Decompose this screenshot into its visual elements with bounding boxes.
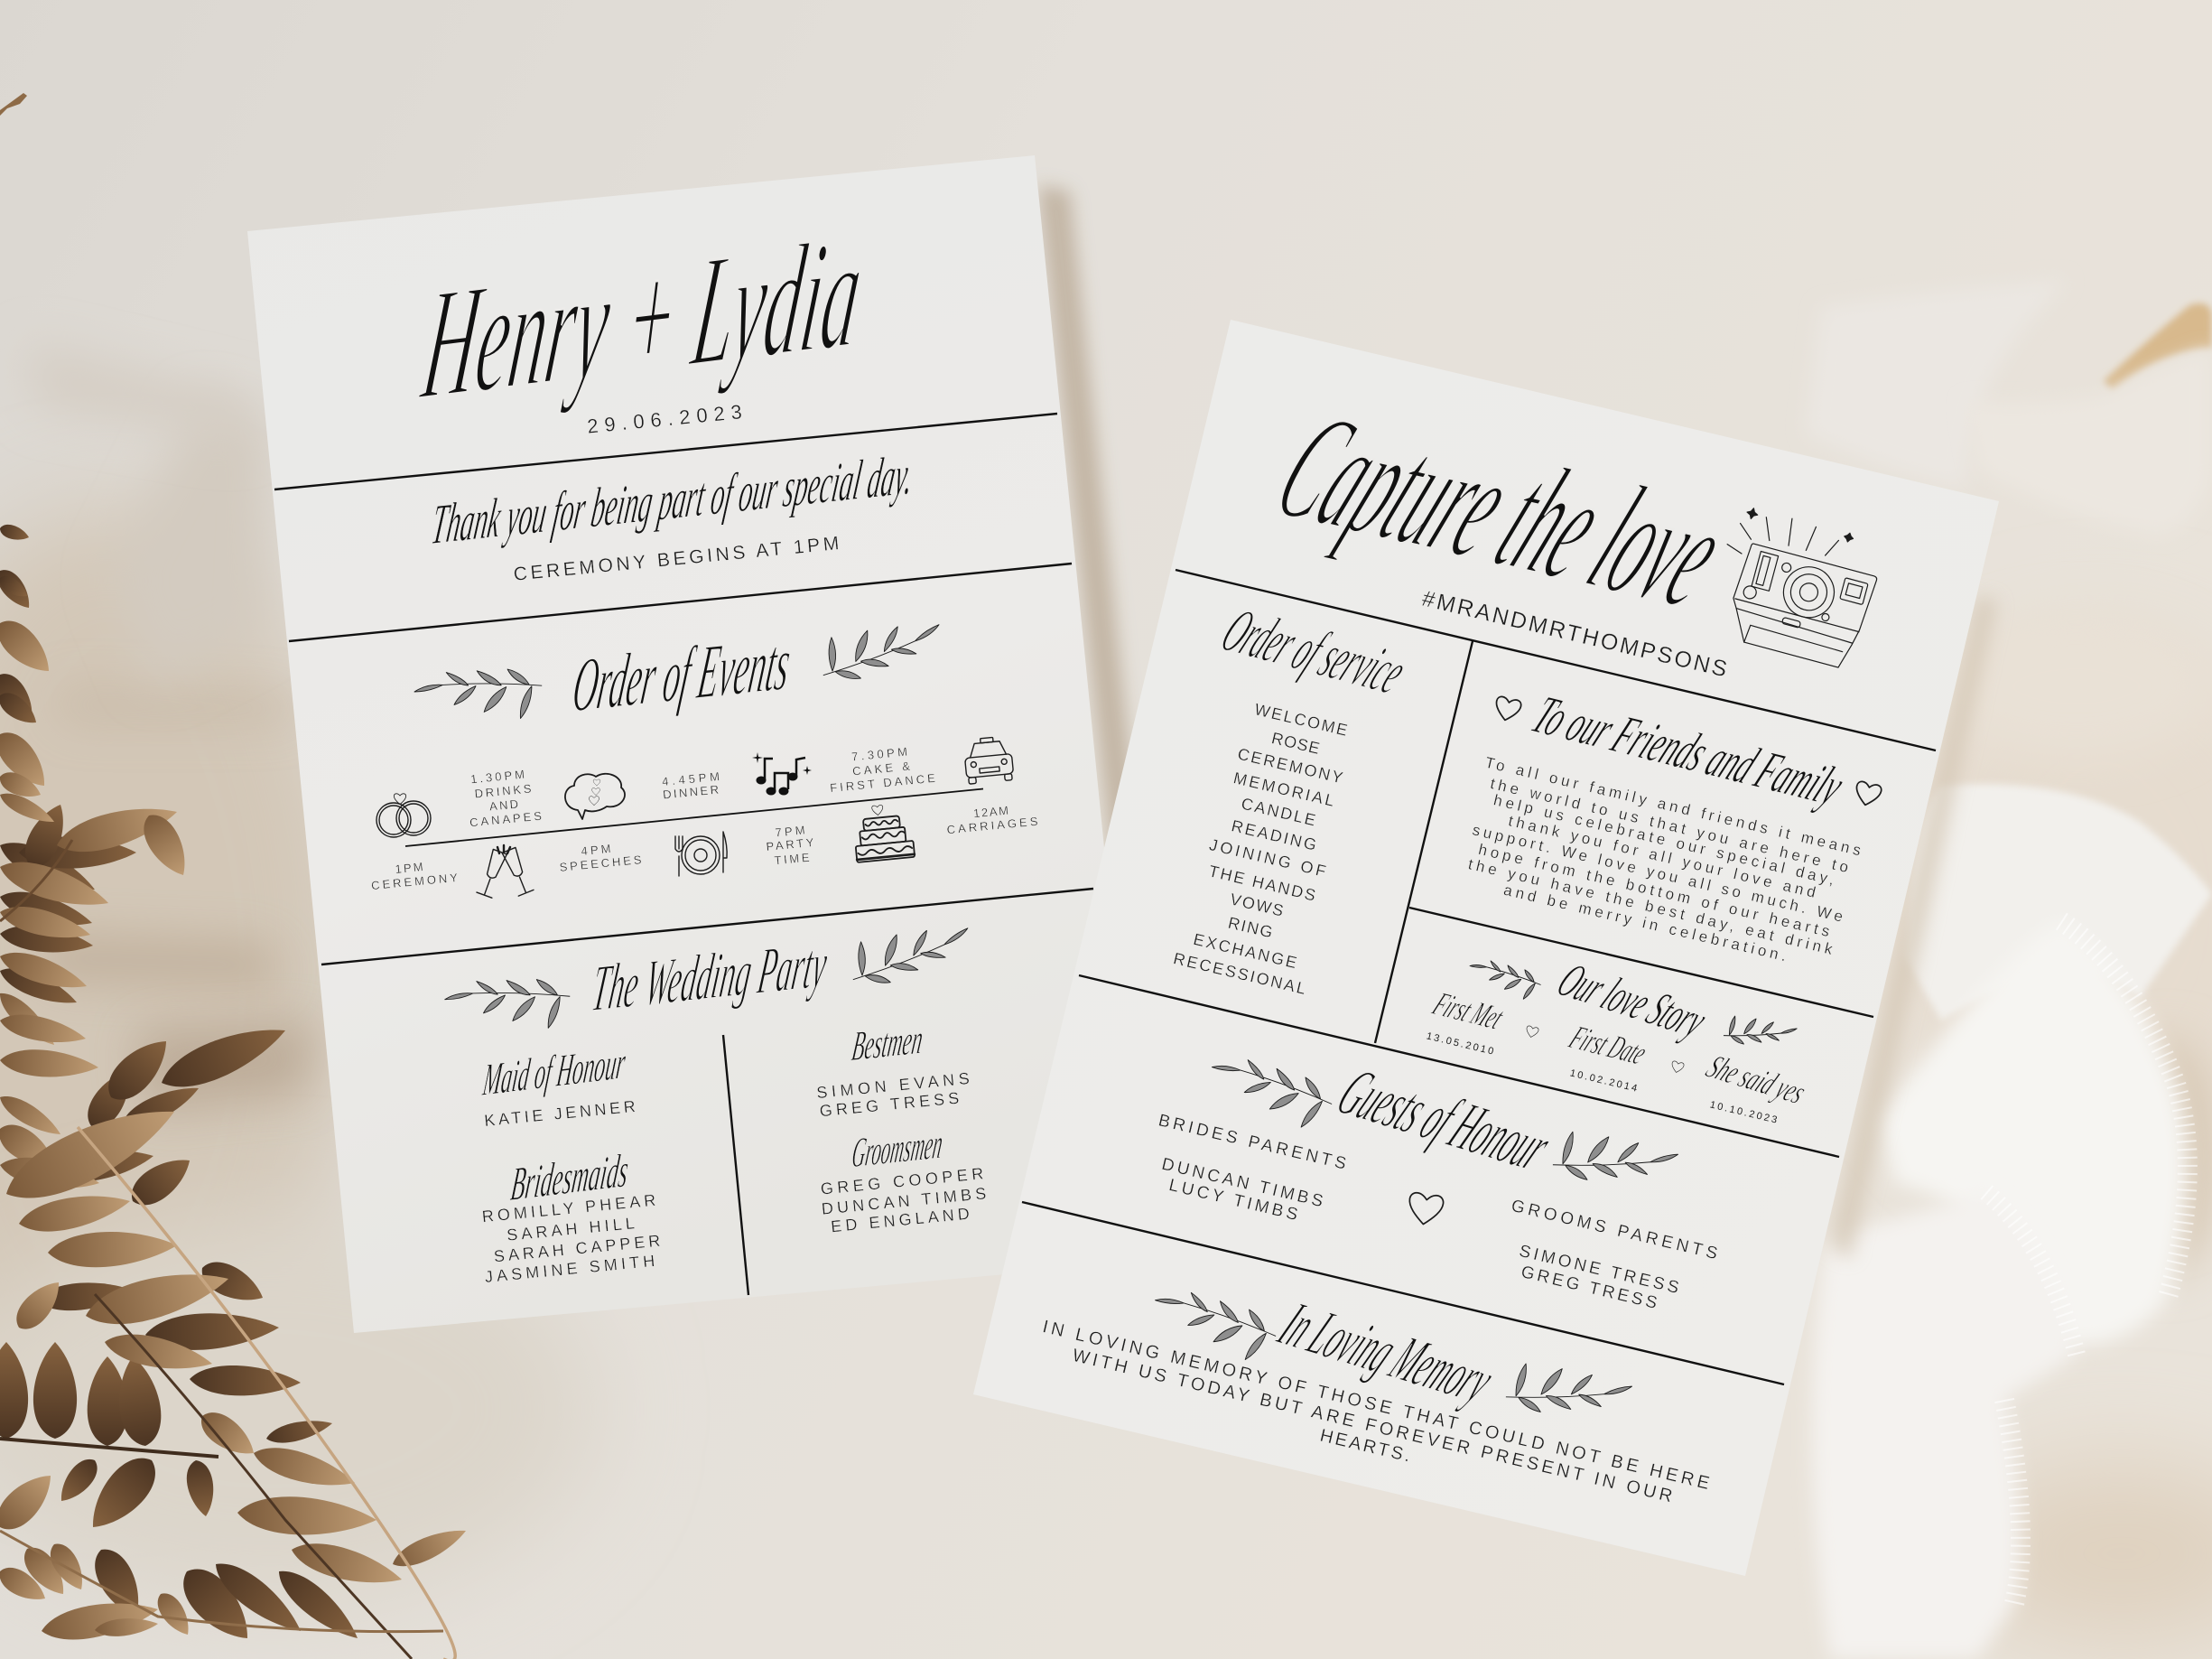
our love story: She said yes	[1699, 1049, 1813, 1111]
service list: EXCHANGE	[1192, 930, 1298, 972]
in loving memory: WITH US TODAY BUT ARE FOREVER PRESENT IN OUR	[1071, 1346, 1674, 1506]
timeline labels: DINNER	[662, 783, 720, 801]
in loving memory: IN LOVING MEMORY OF THOSE THAT COULD NOT BE HERE	[1041, 1317, 1711, 1494]
order of service	[1172, 595, 1419, 998]
column divider	[723, 1035, 748, 1295]
groom party names: DUNCAN TIMBS	[821, 1184, 987, 1218]
guests of honour: GREG TRESS	[1520, 1263, 1659, 1313]
timeline labels	[371, 745, 1038, 892]
groom party names: Groomsmen	[850, 1121, 945, 1177]
timeline labels: 7PM	[775, 823, 805, 840]
timeline labels: CAKE &	[851, 759, 911, 778]
friends and family message: To our Friends and Family	[1522, 685, 1854, 816]
sprig pair and heading	[1466, 950, 1544, 1003]
our love story: 13.05.2010	[1426, 1030, 1494, 1058]
icon: wedding cake	[852, 802, 915, 862]
timeline labels: FIRST DANCE	[830, 771, 936, 795]
icon: wedding car	[963, 736, 1014, 784]
groom party names: GREG COOPER	[820, 1164, 984, 1198]
timeline labels: SPEECHES	[559, 853, 642, 874]
guests of honour: Guests of Honour	[1324, 1055, 1565, 1185]
service list: THE HANDS	[1207, 862, 1317, 905]
icon: music notes	[752, 752, 812, 795]
dried fern branch	[0, 93, 470, 1659]
message body: and be merry in celebration.	[1502, 881, 1788, 965]
ceremony start time: CEREMONY BEGINS AT 1PM	[513, 533, 840, 585]
message body: the world to us that you are here to	[1489, 775, 1850, 876]
bridal party names: Bridesmaids	[508, 1144, 631, 1211]
sprig pair and heading	[1148, 1273, 1281, 1367]
timeline labels: CARRIAGES	[946, 815, 1038, 836]
in loving memory: HEARTS.	[1318, 1426, 1412, 1466]
timeline labels: AND	[488, 797, 519, 813]
timeline labels: TIME	[774, 851, 810, 867]
icon: wedding rings	[376, 794, 431, 837]
icon: speech bubble with hearts	[565, 774, 625, 819]
groom party names: ED ENGLAND	[830, 1205, 971, 1235]
our love story: 10.10.2023	[1709, 1099, 1778, 1126]
order of events heading	[414, 607, 947, 729]
service list: VOWS	[1229, 890, 1285, 920]
divider rules	[1022, 570, 1936, 1384]
message body: hope from the bottom of our hearts	[1477, 841, 1831, 940]
timeline labels: CANAPES	[469, 809, 543, 829]
divider rules	[274, 414, 1093, 965]
bridal party names: Maid of Honour	[480, 1037, 628, 1105]
groom party names: Bestmen	[850, 1016, 925, 1070]
friends and family message	[1466, 685, 1882, 965]
message body: help us celebrate our special day,	[1492, 791, 1836, 889]
our love story: First Date	[1563, 1020, 1653, 1072]
bridal party names: SARAH CAPPER	[493, 1232, 661, 1265]
panel: wedding programme sheet	[247, 155, 1146, 1333]
panel: capture the love sheet	[973, 320, 1999, 1576]
timeline labels: 7.30PM	[850, 745, 908, 763]
icon: instant camera	[1704, 503, 1887, 671]
our love story: Our love Story	[1547, 954, 1717, 1048]
message body: To all our family and friends it means	[1483, 754, 1863, 859]
panel: wedding programme sheet: Henry + Lydia	[414, 203, 871, 433]
sprig pair and heading	[1204, 1041, 1337, 1134]
bridal party names: KATIE JENNER	[483, 1097, 637, 1130]
sprig pair	[443, 971, 572, 1030]
service list: CEREMONY	[1236, 745, 1344, 787]
panel: wedding programme sheet: Thank you for being part of our special day.	[428, 443, 917, 556]
message body	[1466, 754, 1863, 965]
message body: support. We love you all so much. We	[1471, 821, 1845, 926]
icon: heart right	[1854, 780, 1882, 807]
groom party names	[815, 1016, 987, 1235]
guests of honour: GROOMS PARENTS	[1510, 1197, 1719, 1263]
panel: capture the love sheet: Order of service	[1210, 595, 1419, 707]
service list: READING	[1230, 816, 1318, 854]
service list: WELCOME	[1253, 700, 1349, 740]
order of events heading: Order of Events	[568, 620, 795, 729]
service list: RING	[1226, 914, 1275, 941]
icon: champagne flutes	[477, 845, 534, 898]
wedding date: 29.06.2023	[586, 400, 743, 438]
guests of honour: BRIDES PARENTS	[1157, 1111, 1348, 1174]
service list	[1172, 700, 1349, 998]
our love story: First Met	[1427, 986, 1510, 1037]
bridal party names: ROMILLY PHEAR	[481, 1191, 656, 1226]
guests of honour: SIMONE TRESS	[1518, 1242, 1680, 1298]
our love story: 10.02.2014	[1569, 1067, 1638, 1095]
bridal party names	[480, 1037, 661, 1286]
wedding party heading	[443, 910, 976, 1030]
message body: thank you for all your love and	[1507, 812, 1817, 901]
our love story	[1426, 950, 1813, 1126]
ribbon: tan spool	[2104, 303, 2212, 390]
sprig left	[414, 663, 543, 720]
timeline labels: 4PM	[581, 842, 611, 858]
in loving memory: In Loving Memory	[1266, 1290, 1507, 1416]
shadow of left sheet	[1038, 185, 1147, 939]
guests of honour: LUCY TIMBS	[1167, 1176, 1299, 1225]
message body: the you have the best day, eat drink	[1466, 855, 1835, 958]
timeline labels: 1.30PM	[469, 768, 525, 786]
timeline labels: DRINKS	[474, 781, 532, 800]
icon: plate and cutlery	[675, 832, 727, 876]
shadow of right sheet	[1829, 596, 1997, 1260]
service list: JOINING OF	[1207, 835, 1328, 881]
icon: heart left	[1493, 695, 1522, 722]
guests of honour	[1157, 1041, 1719, 1313]
bridal party names: SARAH HILL	[506, 1214, 636, 1244]
groom party names: SIMON EVANS	[815, 1069, 971, 1102]
service list: RECESSIONAL	[1172, 949, 1307, 998]
service list: CANDLE	[1240, 795, 1317, 829]
guests of honour: DUNCAN TIMBS	[1160, 1155, 1324, 1211]
bridal party names: JASMINE SMITH	[484, 1252, 655, 1286]
white silk ribbons	[1806, 280, 2212, 1659]
timeline labels: 12AM	[972, 804, 1009, 820]
wedding party heading: The Wedding Party	[588, 927, 832, 1025]
timeline labels: 4.45PM	[661, 769, 720, 788]
service list: ROSE	[1269, 729, 1322, 758]
timeline of events	[371, 736, 1038, 898]
timeline labels: CEREMONY	[371, 871, 459, 892]
timeline labels: 1PM	[395, 860, 423, 876]
hashtag: #MRANDMRTHOMPSONS	[1419, 586, 1730, 682]
timeline labels: PARTY	[766, 835, 814, 853]
groom party names: GREG TRESS	[819, 1089, 960, 1120]
service list: MEMORIAL	[1231, 769, 1336, 810]
